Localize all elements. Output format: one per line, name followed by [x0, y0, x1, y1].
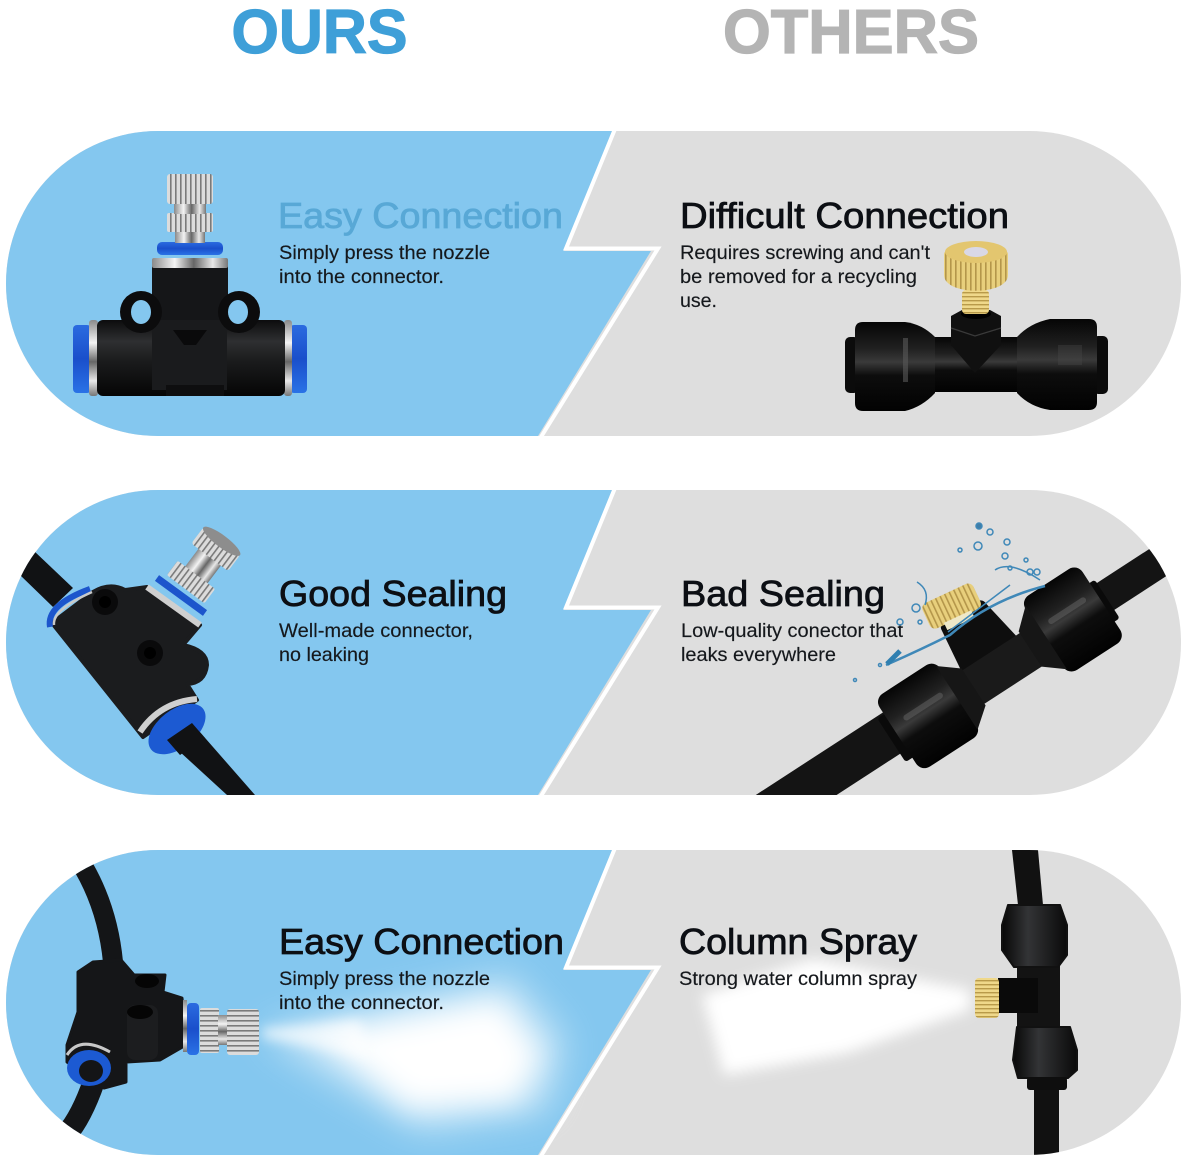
heading: easy connection: Easy Connection: [278, 195, 563, 236]
text: column spray description: Strong water column spray: [679, 968, 917, 990]
icon: ours connector spraying: [67, 868, 259, 1130]
right panel background: [6, 490, 1181, 795]
text: easy connection description: into the connector.: [279, 266, 444, 288]
heading: easy connection: Easy Connection: [279, 921, 564, 962]
text: difficult connection description: Requires screwing and can't: [680, 242, 931, 264]
icon: leaking brass nozzle: [920, 582, 985, 636]
text: good sealing description: no leaking: [279, 644, 369, 666]
icon: others screw-in connector: [845, 241, 1108, 411]
icon: others connector spraying: [975, 850, 1077, 1156]
text: difficult connection description: be removed for a recycling: [680, 266, 917, 288]
title: OTHERS: OTHERS: [723, 0, 979, 67]
left panel background: [6, 131, 651, 436]
text: easy connection description: into the connector.: [279, 992, 444, 1014]
title: OURS: OURS: [232, 0, 408, 67]
heading: good sealing: Good Sealing: [279, 573, 507, 614]
text: easy connection description: Simply press the nozzle: [279, 968, 490, 990]
left panel background: [6, 850, 651, 1155]
icon: ours push-in connector: [73, 174, 307, 396]
heading: column spray: Column Spray: [679, 921, 917, 962]
mist spray: ours: [262, 975, 565, 1130]
heading: bad sealing: Bad Sealing: [681, 573, 885, 614]
heading: difficult connection: Difficult Connection: [680, 195, 1009, 236]
text: difficult connection description: use.: [680, 290, 717, 312]
text: easy connection description: Simply press the nozzle: [279, 242, 490, 264]
text: good sealing description: Well-made connector,: [279, 620, 473, 642]
panel: connection comparison: [6, 129, 1181, 437]
icon: water splash: [854, 523, 1045, 682]
icon: ours sealed connector with tube: [20, 522, 255, 795]
text: bad sealing description: Low-quality conector that: [681, 620, 904, 642]
icon: others leaking connector with tube: [756, 549, 1166, 795]
right panel background: [6, 850, 1181, 1155]
right panel background: [6, 131, 1181, 436]
panel: spray comparison: [6, 848, 1181, 1156]
text: bad sealing description: leaks everywhere: [681, 644, 836, 666]
mist spray: others: [702, 959, 970, 1075]
panel: sealing comparison: [6, 490, 1181, 795]
left panel background: [6, 490, 651, 795]
